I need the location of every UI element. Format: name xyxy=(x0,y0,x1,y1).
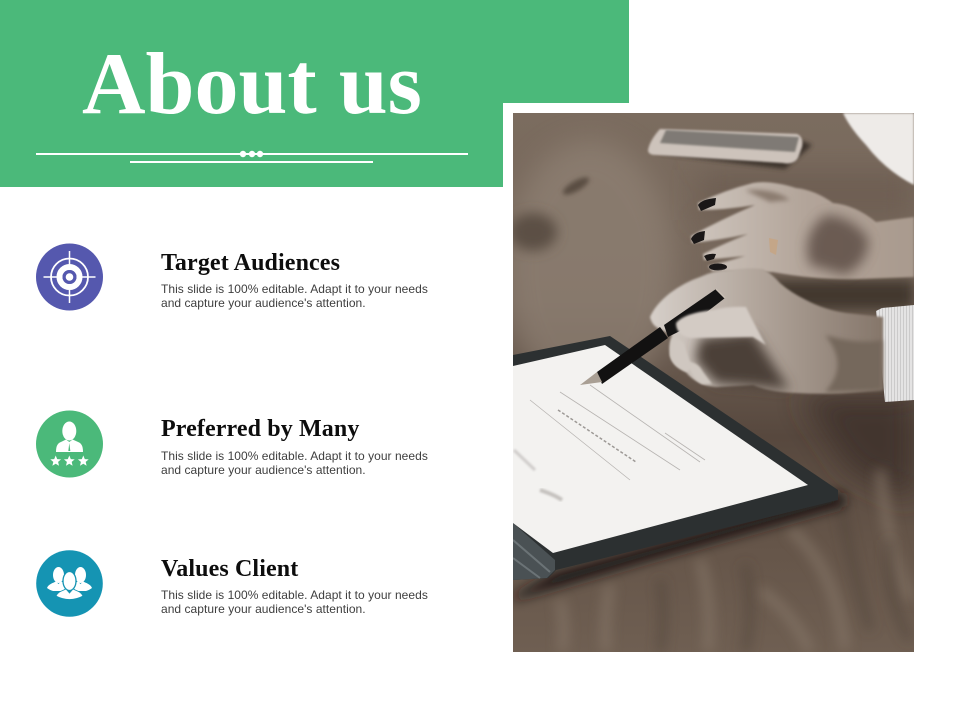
clipboard with paper xyxy=(513,336,846,600)
white sleeve top right xyxy=(843,113,914,185)
heading: target audiences: Target Audiences xyxy=(161,250,340,276)
table xyxy=(505,113,914,652)
title ornament xyxy=(36,150,468,163)
text: preferred by many: and capture your audience's attention. xyxy=(161,463,366,477)
heading: preferred by many: Preferred by Many xyxy=(161,416,359,442)
text: target audiences: and capture your audience's attention. xyxy=(161,296,366,310)
title: About us xyxy=(82,36,422,133)
phone xyxy=(648,129,812,169)
text: values client: This slide is 100% editable. Adapt it to your needs xyxy=(161,588,428,602)
text: preferred by many xyxy=(161,449,428,477)
text: values client xyxy=(161,588,428,616)
man's hand xyxy=(650,268,883,394)
text: target audiences: This slide is 100% editable. Adapt it to your needs xyxy=(161,282,428,296)
icon: target xyxy=(36,244,103,310)
icon: preferred person with stars xyxy=(36,410,103,478)
icon: client group xyxy=(36,550,103,617)
text: target audiences xyxy=(161,282,428,310)
photo: hands signing a document on a wooden table xyxy=(513,113,914,652)
text: values client: and capture your audience's attention. xyxy=(161,602,366,616)
header banner xyxy=(0,0,629,187)
thumb xyxy=(676,307,766,345)
pen xyxy=(580,289,725,385)
shirt cuff xyxy=(876,305,914,402)
woman's hand xyxy=(691,182,914,279)
heading: values client: Values Client xyxy=(161,556,298,582)
text: preferred by many: This slide is 100% editable. Adapt it to your needs xyxy=(161,449,428,463)
